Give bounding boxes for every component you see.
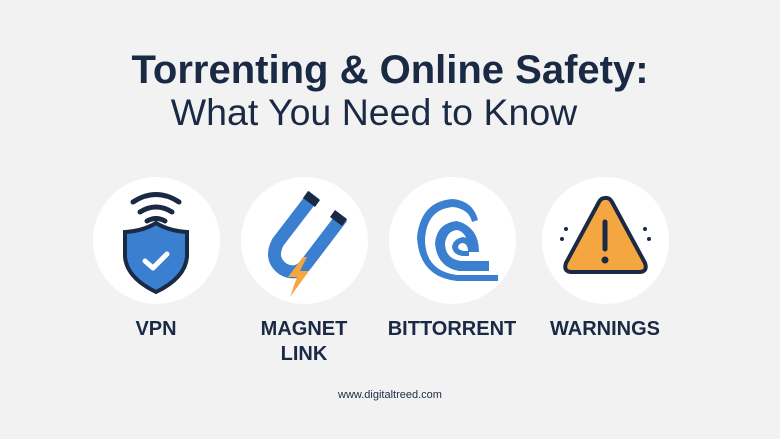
label: magnet link: MAGNET — [261, 318, 347, 340]
label: warnings: WARNINGS — [550, 318, 660, 340]
label: VPN: VPN — [135, 318, 177, 340]
icon: VPN shield — [93, 177, 220, 304]
label: magnet link: LINK — [281, 343, 327, 365]
title: Torrenting & Online Safety: — [131, 48, 649, 92]
icon: bittorrent — [389, 177, 516, 304]
icon: warning — [542, 177, 669, 304]
label: magnet link — [261, 318, 348, 365]
label: bittorrent: BITTORRENT — [388, 318, 516, 340]
icon: magnet — [241, 177, 368, 304]
subtitle: What You Need to Know — [171, 91, 577, 133]
footer url: www.digitaltreed.com — [338, 389, 442, 401]
